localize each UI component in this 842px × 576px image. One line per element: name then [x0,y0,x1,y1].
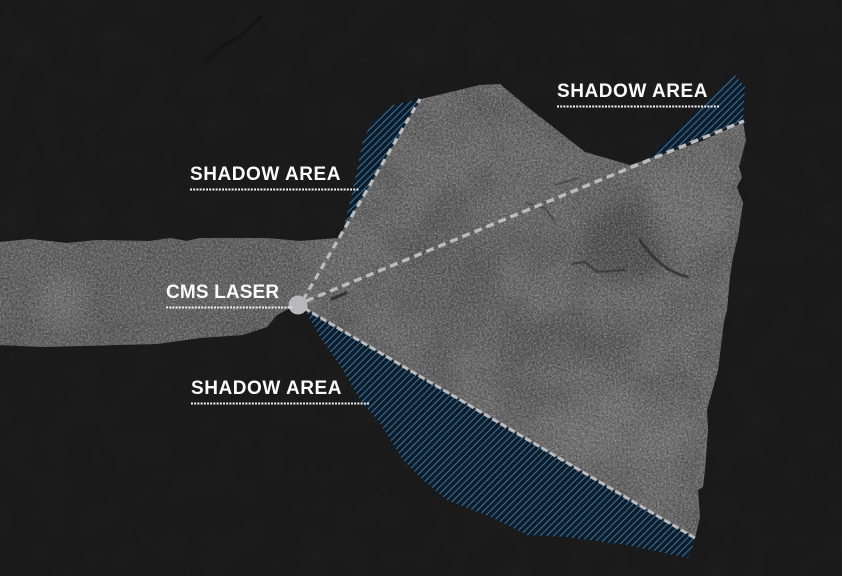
shadow area: upper right hatch [645,75,745,160]
rock surface: tunnel and stope [0,84,746,538]
laser sight lines [303,99,744,538]
shadow area: lower hatch [304,308,695,558]
label: CMS laser: CMS LASER [166,282,279,303]
sight line: middle [306,121,744,301]
label: shadow area upper right: SHADOW AREA [557,81,708,102]
CMS laser point [288,296,308,314]
label: shadow area upper left: SHADOW AREA [190,164,341,185]
rock crease detail [332,178,688,299]
sight line: lower [304,308,695,538]
shadow area: upper left hatch [338,99,421,238]
label: shadow area lower: SHADOW AREA [191,378,342,399]
sight line: upper [303,99,420,300]
